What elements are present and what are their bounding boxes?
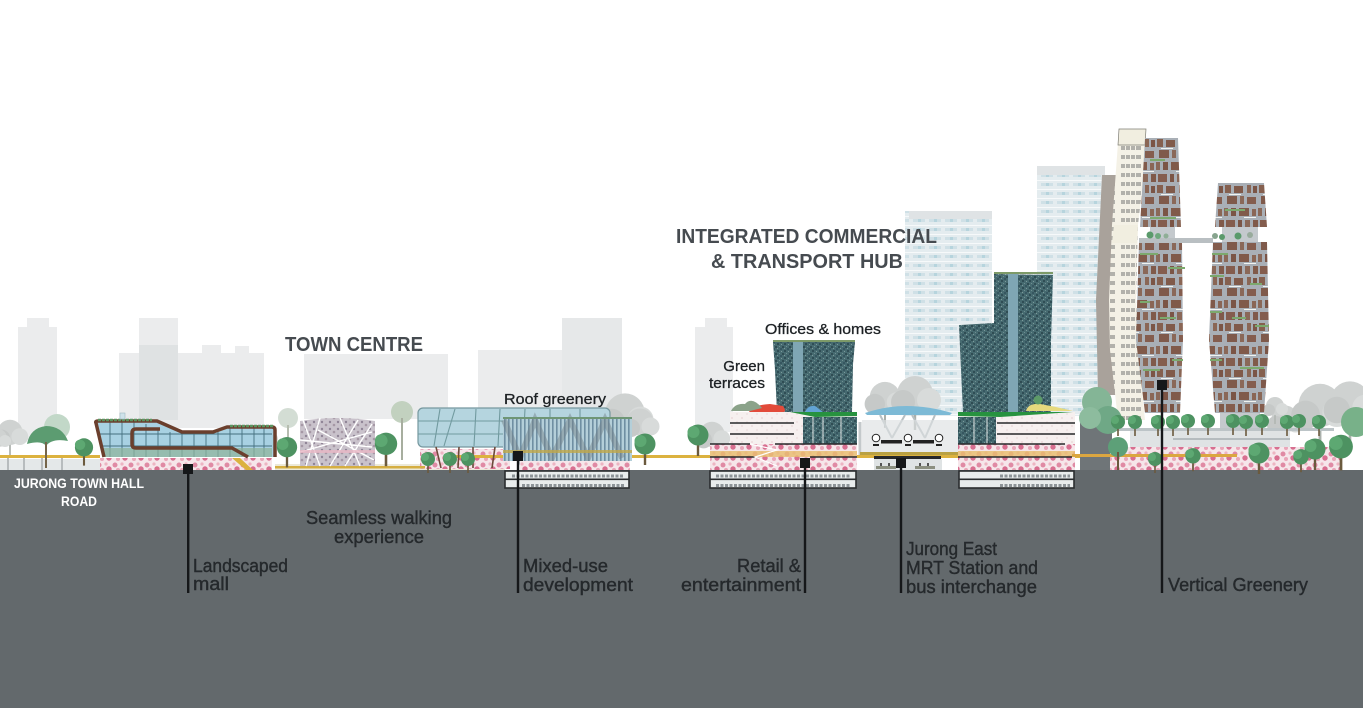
- mixed-use development mesh: [503, 417, 632, 470]
- callout: jurong east mrt station and bus interchange: Jurong East: [906, 539, 997, 559]
- callout: mixed-use development: development: [523, 575, 633, 595]
- label: integrated commercial and transport hub: INTEGRATED COMMERCIAL: [676, 225, 937, 248]
- street trees: [27, 387, 1363, 474]
- left commercial podium: [710, 412, 857, 470]
- grey background trees: [0, 376, 1363, 460]
- label: seamless walking experience: [306, 508, 452, 547]
- left commercial tower: [773, 340, 855, 412]
- label: offices and homes: Offices & homes: [765, 321, 881, 338]
- vertical greenery towers: [1136, 138, 1269, 428]
- label: roof greenery: Roof greenery: [504, 391, 607, 408]
- callout: retail and entertainment: entertainment: [681, 575, 801, 595]
- right commercial podium: [958, 396, 1075, 470]
- mixed-use basement: [505, 471, 629, 488]
- label: green terraces: Green: [723, 358, 765, 375]
- callout: jurong east mrt station and bus interchange: MRT Station and: [906, 558, 1038, 578]
- label: seamless walking experience: experience: [334, 527, 424, 547]
- label: jurong town hall road: JURONG TOWN HALL: [14, 476, 144, 491]
- callout: retail and entertainment: [681, 458, 810, 595]
- station canopy and interchange: [860, 406, 962, 470]
- right commercial tower: [959, 273, 1053, 412]
- callout: vertical greenery: [1157, 380, 1308, 595]
- callout: vertical greenery: Vertical Greenery: [1168, 575, 1308, 595]
- plaza podium: [1072, 420, 1340, 470]
- label: town centre: TOWN CENTRE: [285, 333, 423, 356]
- label: seamless walking experience: Seamless walking: [306, 508, 452, 528]
- callout: mixed-use development: Mixed-use: [523, 556, 608, 576]
- label: integrated commercial and transport hub: [676, 225, 937, 273]
- label: jurong town hall road: ROAD: [61, 494, 97, 509]
- landscaped mall: [96, 413, 275, 470]
- callout: landscaped mall: mall: [193, 574, 229, 594]
- ground: [0, 470, 1363, 708]
- callout: retail and entertainment: Retail &: [737, 556, 801, 576]
- green terraces: [731, 401, 823, 412]
- left commercial basement: [710, 471, 856, 488]
- nest pavilion: [300, 418, 375, 466]
- street level strip: [0, 449, 1237, 470]
- label: integrated commercial and transport hub: & TRANSPORT HUB: [711, 250, 903, 273]
- callout: jurong east mrt station and bus interchange: [896, 458, 1038, 597]
- callout: jurong east mrt station and bus interchange: bus interchange: [906, 577, 1037, 597]
- background skyline: [18, 318, 733, 440]
- callout: landscaped mall: [183, 464, 288, 594]
- callout: mixed-use development: [513, 451, 633, 595]
- right commercial basement: [959, 471, 1074, 488]
- label: green terraces: [709, 358, 765, 392]
- label: green terraces: terraces: [709, 375, 765, 392]
- cream tower behind: [1096, 129, 1146, 420]
- background residential towers: [905, 166, 1105, 416]
- label: jurong town hall road: [14, 476, 144, 509]
- glass building: [418, 408, 610, 468]
- callout: landscaped mall: Landscaped: [193, 556, 288, 576]
